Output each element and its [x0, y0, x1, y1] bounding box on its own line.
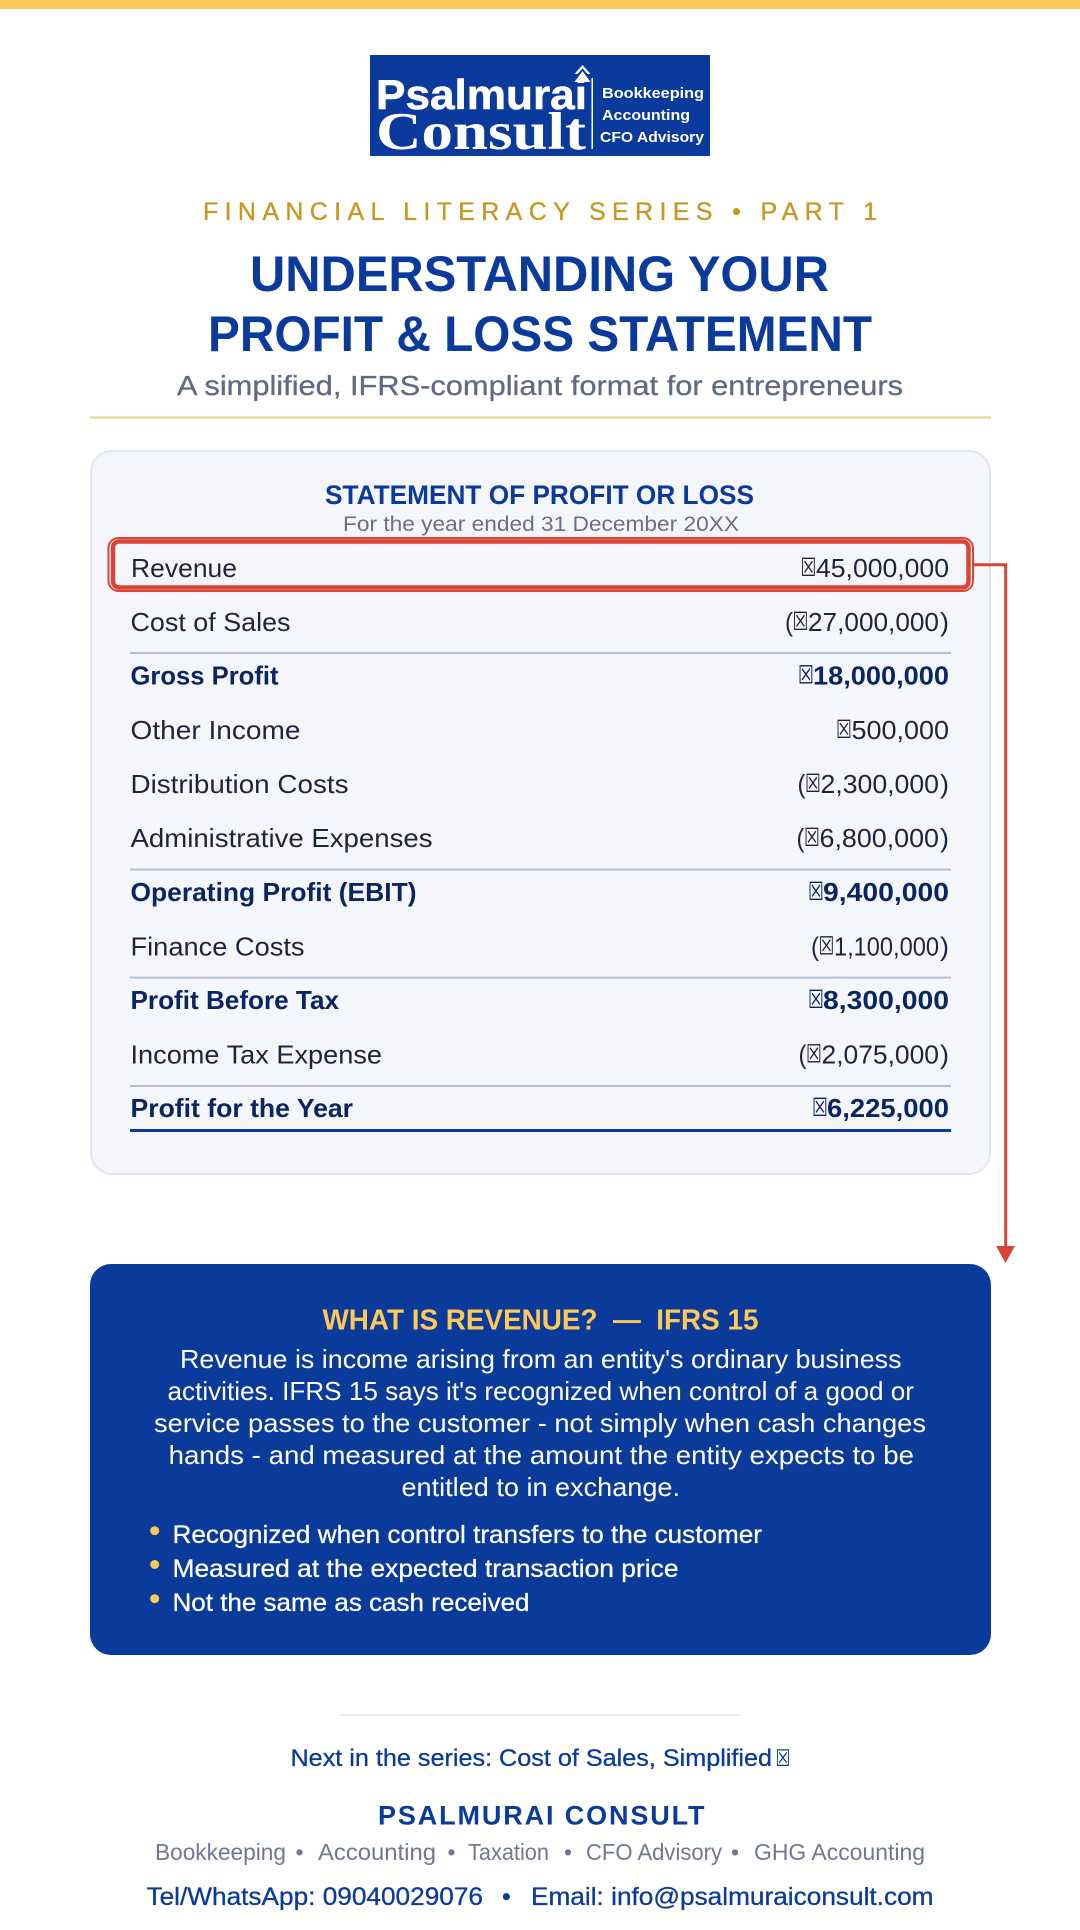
row: finance costs: Finance Costs	[130, 932, 304, 962]
title	[208, 246, 872, 362]
row: income tax expense: ☒	[806, 1039, 822, 1068]
row: profit for the year: 6,225,000	[827, 1093, 949, 1123]
row: administrative expenses: (	[796, 823, 805, 853]
row: cost of sales: ☒	[792, 607, 808, 636]
row: finance costs: (	[811, 932, 819, 962]
services list	[155, 1839, 925, 1865]
logo: Accounting	[602, 107, 690, 124]
revenue highlight	[108, 538, 973, 591]
row: other income: 500,000	[852, 715, 949, 745]
row: finance costs: ☒	[818, 932, 834, 960]
row: income tax expense: )	[940, 1039, 949, 1069]
next in series: ☒	[776, 1746, 790, 1772]
row: distribution costs: Distribution Costs	[130, 769, 348, 799]
key points list: Measured at the expected transaction price	[172, 1555, 678, 1583]
row: administrative expenses: ☒	[804, 823, 820, 852]
row: distribution costs: ☒	[805, 769, 821, 798]
row: profit for the year: ☒	[812, 1093, 828, 1122]
key points list: Not the same as cash received	[172, 1589, 530, 1617]
key points list	[150, 1521, 762, 1617]
services list: •	[296, 1839, 304, 1865]
row: distribution costs: (	[798, 769, 806, 799]
row: gross profit	[130, 660, 949, 690]
row: income tax expense: Income Tax Expense	[130, 1039, 382, 1069]
row: profit before tax: 8,300,000	[823, 985, 949, 1015]
contact details: •	[502, 1883, 511, 1911]
services list: CFO Advisory	[586, 1839, 722, 1865]
row: cost of sales: (	[785, 607, 793, 637]
row: distribution costs: 2,300,000	[820, 769, 939, 799]
logo: CFO Advisory	[600, 129, 705, 146]
explanation paragraph: service passes to the customer - not simply when cash changes	[154, 1408, 926, 1438]
row: profit for the year	[130, 1093, 949, 1123]
explanation paragraph	[154, 1344, 926, 1502]
row: finance costs: )	[940, 932, 949, 962]
panel: what is revenue	[90, 1264, 991, 1655]
row: income tax expense	[130, 1039, 949, 1069]
panel background	[90, 1264, 991, 1655]
row: operating profit: 9,400,000	[823, 877, 949, 907]
row: gross profit: ☒	[798, 660, 814, 689]
row: distribution costs	[130, 769, 949, 799]
title: UNDERSTANDING YOUR	[250, 246, 829, 302]
arrow: revenue to explanation	[972, 565, 1015, 1263]
row: operating profit: ☒	[808, 877, 824, 906]
services list: Accounting	[318, 1839, 436, 1865]
services list: GHG Accounting	[754, 1839, 925, 1865]
panel heading: WHAT IS REVENUE? — IFRS 15	[322, 1304, 758, 1336]
explanation paragraph: hands - and measured at the amount the entity expects to be	[169, 1440, 914, 1470]
series label: FINANCIAL LITERACY SERIES • PART 1	[203, 198, 877, 226]
row: revenue: ☒	[800, 553, 816, 582]
row: profit before tax: Profit Before Tax	[130, 985, 340, 1015]
row: finance costs	[130, 932, 949, 962]
card background	[91, 451, 990, 1174]
panel: statement of profit or loss	[91, 451, 990, 1174]
logo	[370, 55, 710, 161]
row: finance costs: 1,100,000	[834, 932, 939, 962]
title: PROFIT & LOSS STATEMENT	[208, 306, 872, 362]
row: administrative expenses: Administrative Expenses	[130, 823, 432, 853]
contact details: Email: info@psalmuraiconsult.com	[531, 1883, 934, 1911]
row: profit before tax	[130, 985, 949, 1015]
row: cost of sales: )	[940, 607, 949, 637]
row: cost of sales: Cost of Sales	[130, 607, 290, 637]
row: cost of sales	[130, 607, 949, 637]
key points list: Recognized when control transfers to the customer	[172, 1521, 762, 1549]
row: operating profit: Operating Profit (EBIT)	[130, 877, 416, 907]
row: profit for the year: Profit for the Year	[130, 1093, 353, 1123]
services list: •	[564, 1839, 572, 1865]
contact details	[146, 1883, 934, 1911]
row: administrative expenses: )	[940, 823, 949, 853]
row: distribution costs: )	[940, 769, 949, 799]
row: cost of sales: 27,000,000	[808, 607, 939, 637]
logo: Consult	[376, 103, 586, 161]
row: income tax expense: 2,075,000	[822, 1039, 939, 1069]
top accent bar	[0, 0, 1080, 9]
row: profit before tax: ☒	[808, 985, 824, 1014]
row: other income	[130, 715, 949, 745]
logo: Psalmurai	[376, 71, 587, 118]
row: revenue: 45,000,000	[816, 553, 949, 583]
logo: Bookkeeping	[602, 85, 704, 102]
services list: •	[448, 1839, 456, 1865]
subtitle: A simplified, IFRS-compliant format for entrepreneurs	[177, 370, 903, 401]
row: administrative expenses: 6,800,000	[820, 823, 939, 853]
row: administrative expenses	[130, 823, 949, 853]
explanation paragraph: entitled to in exchange.	[402, 1472, 680, 1502]
row: income tax expense: (	[798, 1039, 807, 1069]
row: revenue: Revenue	[131, 553, 237, 583]
row: other income: Other Income	[130, 715, 300, 745]
services list: •	[731, 1839, 739, 1865]
row: other income: ☒	[836, 715, 852, 744]
row: revenue	[131, 553, 949, 583]
row: gross profit: Gross Profit	[130, 660, 279, 690]
explanation paragraph: activities. IFRS 15 says it's recognized when control of a good or	[168, 1376, 914, 1406]
statement period: For the year ended 31 December 20XX	[343, 513, 739, 536]
footer	[146, 1714, 934, 1911]
company name: PSALMURAI CONSULT	[378, 1800, 705, 1830]
row: gross profit: 18,000,000	[813, 660, 949, 690]
next in series: Next in the series: Cost of Sales, Simplified	[290, 1745, 772, 1772]
contact details: Tel/WhatsApp: 09040029076	[146, 1883, 483, 1911]
row: operating profit	[130, 877, 949, 907]
explanation paragraph: Revenue is income arising from an entity's ordinary business	[180, 1344, 902, 1374]
statement heading: STATEMENT OF PROFIT OR LOSS	[325, 480, 754, 510]
services list: Bookkeeping	[155, 1839, 286, 1865]
services list: Taxation	[468, 1839, 549, 1865]
